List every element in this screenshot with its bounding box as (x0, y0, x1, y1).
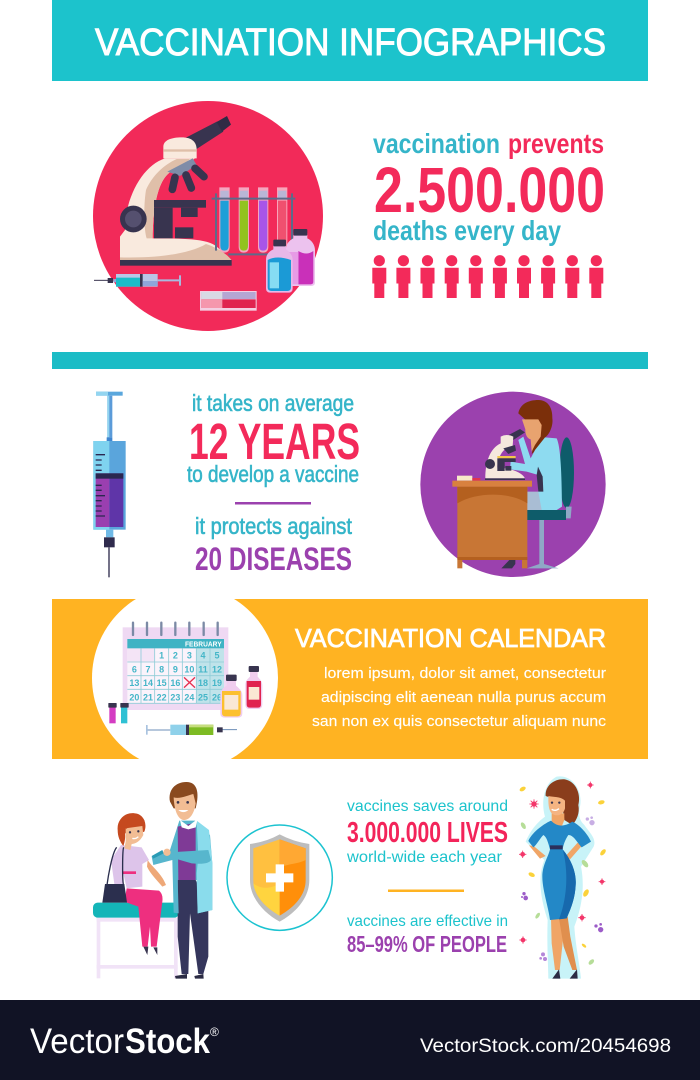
footer bar (0, 1000, 700, 1080)
icon: calendar with vaccines: 14 (143, 678, 153, 688)
icon: calendar with vaccines: 16 (170, 678, 180, 688)
illustration: doctor vaccinating patient (93, 782, 212, 979)
panel: vaccination calendar (52, 585, 648, 771)
stat text: vaccination prevents deaths: prevents (508, 128, 604, 159)
stat text: 12 years and 20 diseases: 20 DISEASES (195, 541, 352, 577)
icon row: ten people (372, 255, 603, 298)
stat text: vaccination prevents deaths: deaths every day (373, 215, 561, 246)
body text (312, 665, 607, 730)
icon: calendar with vaccines: 1 (159, 650, 164, 660)
stat text: lives saved and effectiveness: 85–99% OF PEOPLE (347, 931, 507, 957)
icon: calendar with vaccines (108, 623, 262, 735)
icon: calendar with vaccines: 9 (173, 664, 178, 674)
icon: calendar with vaccines: 26 (212, 692, 222, 702)
icon: calendar with vaccines: 11 (198, 664, 208, 674)
icon: calendar with vaccines: 24 (184, 692, 194, 702)
icon: calendar with vaccines: 19 (212, 678, 222, 688)
icon: calendar with vaccines: 13 (129, 678, 139, 688)
stat text: 12 years and 20 diseases: it protects against (195, 513, 353, 539)
icon: calendar with vaccines: 5 (214, 650, 219, 660)
stat text: vaccination prevents deaths: 2.500.000 (374, 154, 605, 226)
icon: microscope lab circle (93, 101, 323, 331)
logo: Stock (125, 1022, 210, 1061)
stat text: 12 years and 20 diseases: 12 YEARS (189, 413, 360, 470)
stat text: 12 years and 20 diseases (187, 390, 360, 577)
icon: calendar with vaccines: 6 (132, 664, 137, 674)
icon: calendar with vaccines: 21 (143, 692, 153, 702)
logo: Vector (30, 1022, 124, 1061)
icon: calendar with vaccines: 18 (198, 678, 208, 688)
icon: calendar with vaccines: 3 (187, 650, 192, 660)
title banner (52, 0, 648, 81)
stat text: lives saved and effectiveness (346, 798, 508, 957)
icon: calendar with vaccines: 7 (145, 664, 150, 674)
icon: protective shield (227, 825, 332, 930)
stat text: 12 years and 20 diseases: to develop a vaccine (187, 461, 359, 487)
stat text: vaccination prevents deaths: vaccination (373, 128, 500, 159)
stat text: lives saved and effectiveness: vaccines are effective in (347, 913, 508, 930)
body text: lorem ipsum, dolor sit amet, consectetur (324, 665, 606, 682)
logo (30, 1022, 219, 1061)
stat text: 12 years and 20 diseases: it takes on average (192, 390, 354, 416)
stat text: lives saved and effectiveness: vaccines saves around (347, 798, 508, 815)
icon: calendar with vaccines: 25 (198, 692, 208, 702)
body text: san non ex quis consectetur aliquam nunc (312, 713, 607, 730)
stat text: vaccination prevents deaths (373, 128, 605, 246)
icon: calendar with vaccines: 15 (157, 678, 167, 688)
title: VACCINATION INFOGRAPHICS (95, 22, 606, 64)
icon: calendar with vaccines: 23 (170, 692, 180, 702)
icon: calendar with vaccines: FEBRUARY (185, 639, 222, 648)
heading: VACCINATION CALENDAR (295, 623, 606, 653)
icon: large syringe (93, 392, 126, 577)
body text: adipiscing elit aenean nulla purus accum (321, 689, 606, 706)
stat text: lives saved and effectiveness: world-wide each year (346, 849, 503, 866)
image id: VectorStock.com/20454698 (420, 1036, 671, 1057)
illustration: healthy woman with germs (519, 776, 607, 979)
icon: calendar with vaccines: 8 (159, 664, 164, 674)
logo: ® (210, 1025, 219, 1039)
icon: calendar with vaccines: 22 (157, 692, 167, 702)
icon: calendar with vaccines: 4 (200, 650, 205, 660)
icon: calendar with vaccines: 20 (129, 692, 139, 702)
icon: calendar with vaccines: 2 (173, 650, 178, 660)
icon: scientist at microscope (420, 392, 606, 577)
stat text: lives saved and effectiveness: 3.000.000 LIVES (347, 817, 508, 849)
icon: calendar with vaccines: 12 (212, 664, 222, 674)
icon: calendar with vaccines: 10 (184, 664, 194, 674)
